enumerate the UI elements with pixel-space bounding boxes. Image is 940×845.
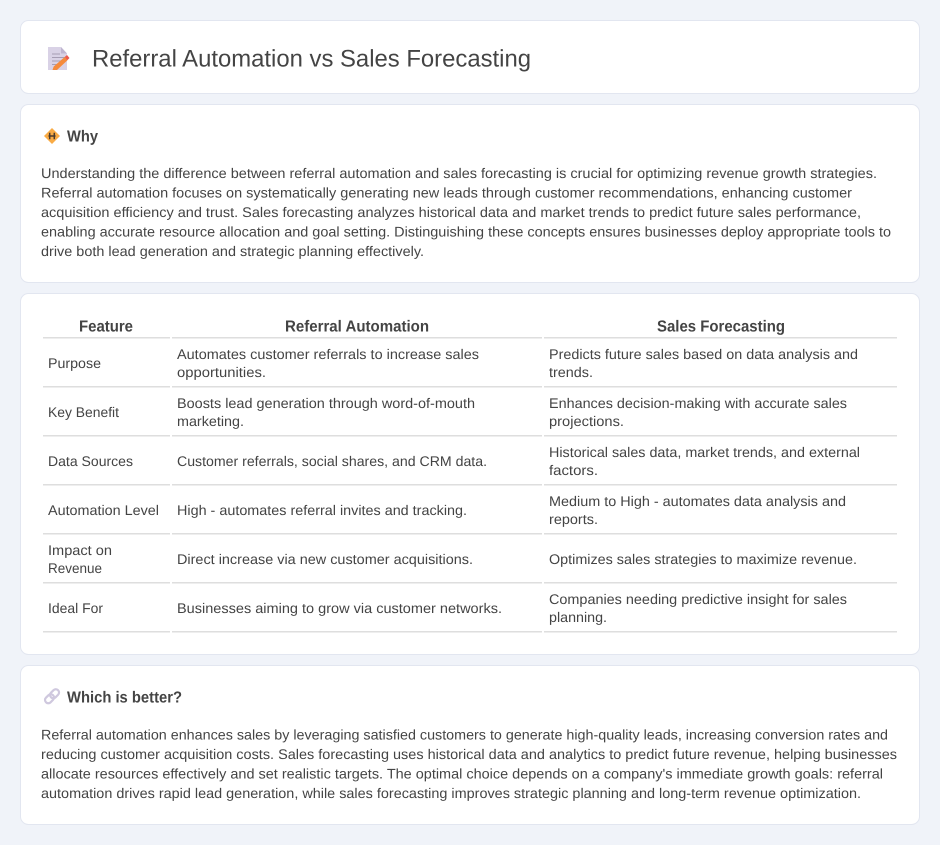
- row: data sources: [43, 444, 897, 486]
- row: purpose: trends.: [549, 364, 593, 380]
- row: automation level: reports.: [549, 511, 598, 527]
- row: data sources: Historical sales data, market trends, and external: [549, 444, 860, 460]
- icon: document with pencil: [48, 47, 70, 70]
- text block: which is better paragraph: allocate resources effectively and set realistic targets. The optimal choice depends on a company's immediate growth goals: referral: [41, 766, 883, 782]
- text block: why paragraph: [41, 165, 891, 259]
- table header row: [43, 318, 897, 338]
- row: key benefit: [43, 395, 897, 436]
- table header row: Feature: [79, 318, 133, 336]
- row: ideal for: Companies needing predictive insight for sales: [549, 591, 847, 607]
- row: key benefit: marketing.: [177, 413, 244, 429]
- row: impact on revenue: [43, 542, 897, 584]
- row: key benefit: projections.: [549, 413, 624, 429]
- row: automation level: High - automates referral invites and tracking.: [177, 502, 467, 518]
- panel: why: [20, 104, 920, 282]
- row: impact on revenue: Impact on: [48, 542, 112, 558]
- table header row: Sales Forecasting: [657, 318, 785, 336]
- panel: title header: [20, 20, 920, 94]
- row: data sources: factors.: [549, 462, 598, 478]
- text block: why paragraph: enabling accurate resource allocation and goal setting. Distinguishing these concepts ensures businesses deploy appropriate tools to: [41, 224, 891, 240]
- text block: why paragraph: Understanding the difference between referral automation and sales forecasting is crucial for optimizing revenue growth strategies.: [41, 165, 877, 181]
- text block: why paragraph: drive both lead generation and strategic planning effectively.: [41, 243, 424, 259]
- text block: which is better paragraph: automation drives rapid lead generation, while sales forecasting improves strategic planning and long-term revenue optimization.: [41, 785, 861, 801]
- row: ideal for: Ideal For: [48, 600, 103, 616]
- text block: which is better paragraph: reducing customer acquisition costs. Sales forecasting uses historical data and analytics to predict future revenue, helping businesses: [41, 746, 897, 762]
- row: key benefit: Boosts lead generation through word-of-mouth: [177, 395, 475, 411]
- row: purpose: Automates customer referrals to increase sales: [177, 346, 479, 362]
- row: automation level: Medium to High - automates data analysis and: [549, 493, 846, 509]
- icon: link: [44, 688, 60, 705]
- panel: comparison table: [20, 294, 920, 654]
- icon: orange diamond sign: [44, 128, 60, 144]
- row: ideal for: Businesses aiming to grow via customer networks.: [177, 600, 502, 616]
- row: automation level: [43, 493, 897, 534]
- row: automation level: Automation Level: [48, 502, 159, 518]
- row: purpose: opportunities.: [177, 364, 266, 380]
- row: key benefit: Key Benefit: [48, 404, 119, 420]
- row: ideal for: [43, 591, 897, 632]
- row: impact on revenue: Revenue: [48, 560, 102, 576]
- text block: why paragraph: Referral automation focuses on systematically generating new leads through customer recommendations, enhancing customer: [41, 184, 852, 200]
- text block: which is better paragraph: Referral automation enhances sales by leveraging satisfied customers to generate high-quality leads, increasing conversion rates and: [41, 726, 888, 742]
- row: purpose: [43, 346, 897, 388]
- row: key benefit: Enhances decision-making with accurate sales: [549, 395, 847, 411]
- row: purpose: Purpose: [48, 355, 101, 371]
- text block: why paragraph: acquisition efficiency and trust. Sales forecasting analyzes historical data and market trends to predict future sales performance,: [41, 204, 861, 220]
- row: impact on revenue: Optimizes sales strategies to maximize revenue.: [549, 551, 857, 567]
- text block: which is better paragraph: [41, 726, 897, 801]
- row: impact on revenue: Direct increase via new customer acquisitions.: [177, 551, 473, 567]
- heading: which is better: Which is better?: [67, 690, 182, 706]
- panel: which is better: [20, 666, 920, 824]
- row: purpose: Predicts future sales based on data analysis and: [549, 346, 858, 362]
- row: data sources: Customer referrals, social shares, and CRM data.: [177, 453, 487, 469]
- row: ideal for: planning.: [549, 609, 607, 625]
- heading: why: Why: [67, 128, 98, 146]
- table header row: Referral Automation: [285, 318, 429, 336]
- row: data sources: Data Sources: [48, 453, 133, 469]
- title: Referral Automation vs Sales Forecasting: [92, 46, 531, 72]
